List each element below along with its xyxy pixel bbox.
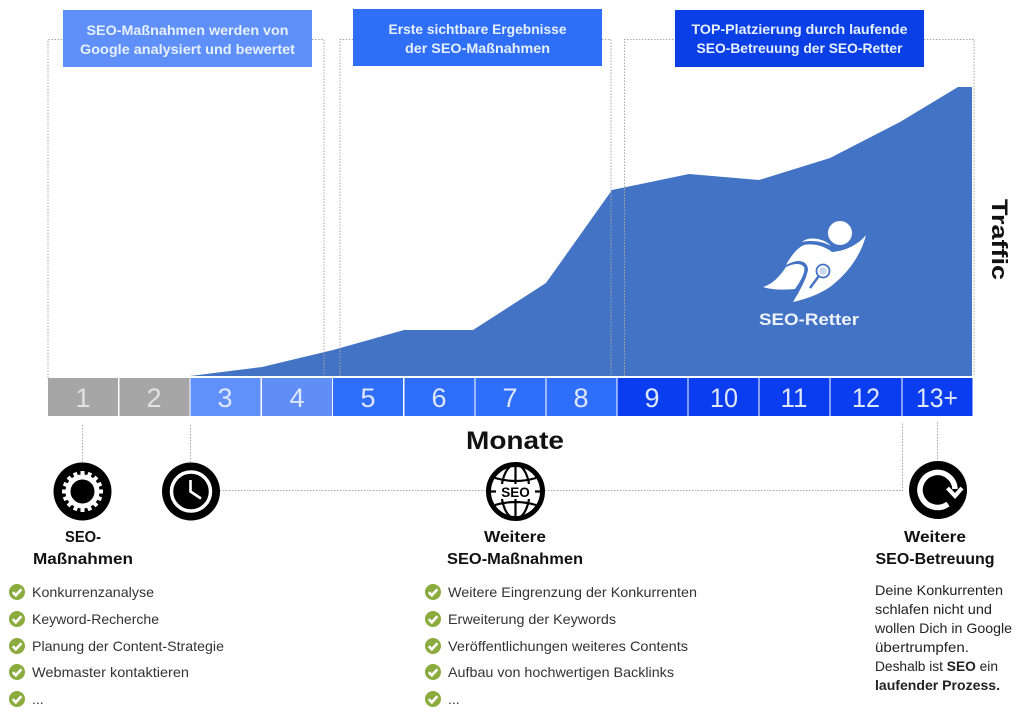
phase box 1: Google analysiert und bewertet [80, 41, 295, 57]
heading: Weitere SEO-Betreuung [876, 529, 994, 568]
logo label: SEO-Retter [759, 310, 859, 329]
checklist: SEO-Maßnahmen: Webmaster kontaktieren [32, 664, 189, 680]
month bar: 7 [502, 383, 518, 413]
text block: laufender Prozess: wollen Dich in Google [874, 620, 1012, 636]
month bar: 11 [780, 383, 808, 413]
heading: Weitere SEO-Maßnahmen: Weitere [484, 529, 546, 546]
month bar: 13+ [916, 383, 958, 413]
phase box 3: TOP-Platzierung durch laufende [692, 21, 908, 37]
month bar [48, 378, 972, 416]
icon: SEO globe [488, 464, 542, 518]
phase box 1: SEO-Maßnahmen werden von [86, 22, 288, 38]
heading: SEO-Maßnahmen [33, 529, 133, 568]
month bar: 5 [360, 383, 376, 413]
month bar: 4 [289, 383, 305, 413]
checklist: Weitere SEO-Maßnahmen [425, 584, 697, 707]
icon: SEO globe: SEO [501, 485, 530, 500]
icon: clock [162, 462, 220, 520]
checklist: Weitere SEO-Maßnahmen: Veröffentlichungen weiteres Contents [448, 638, 688, 654]
checklist: Weitere SEO-Maßnahmen: Weitere Eingrenzung der Konkurrenten [448, 584, 697, 600]
phase box 2: Erste sichtbare Ergebnisse [388, 21, 567, 37]
checklist: Weitere SEO-Maßnahmen: ... [448, 691, 460, 707]
checklist: SEO-Maßnahmen: Planung der Content-Strategie [32, 638, 224, 654]
month bar: 1 [75, 383, 91, 413]
phase box 3: SEO-Betreuung der SEO-Retter [696, 40, 903, 56]
icon: SEO-Retter superhero logo [763, 221, 866, 302]
heading: SEO-Maßnahmen: Maßnahmen [33, 551, 133, 568]
heading: Weitere SEO-Maßnahmen [447, 529, 583, 568]
text block: laufender Prozess: übertrumpfen. [875, 639, 969, 655]
checklist: Weitere SEO-Maßnahmen: Erweiterung der Keywords [448, 611, 616, 627]
heading: Weitere SEO-Maßnahmen: SEO-Maßnahmen [447, 551, 583, 568]
axis label: Monate: Monate [466, 427, 564, 455]
heading: SEO-Maßnahmen: SEO- [65, 529, 101, 546]
text block: laufender Prozess [874, 582, 1012, 693]
text block: laufender Prozess: Deine Konkurrenten [875, 582, 1003, 598]
axis label: Traffic: Traffic [987, 199, 1012, 280]
month bar: 3 [217, 383, 233, 413]
heading: Weitere SEO-Betreuung: SEO-Betreuung [876, 551, 994, 568]
text block: laufender Prozess: schlafen nicht und [875, 601, 992, 617]
traffic area chart [190, 87, 972, 376]
heading: Weitere SEO-Betreuung: Weitere [904, 529, 966, 546]
month bar: 12 [852, 383, 880, 413]
month bar: 2 [146, 383, 162, 413]
month bar: 6 [431, 383, 447, 413]
text block: laufender Prozess: Deshalb ist SEO ein [875, 658, 998, 674]
text block: laufender Prozess: laufender Prozess. [875, 677, 1000, 693]
phase box 3 [675, 10, 924, 67]
phase box 2 [353, 9, 602, 66]
phase box 1 [63, 10, 312, 67]
checklist: SEO-Maßnahmen: ... [32, 691, 44, 707]
checklist: Weitere SEO-Maßnahmen: Aufbau von hochwertigen Backlinks [448, 664, 674, 680]
checklist: SEO-Maßnahmen: Keyword-Recherche [32, 611, 159, 627]
checklist: SEO-Maßnahmen: Konkurrenzanalyse [32, 584, 154, 600]
icon: gear [54, 462, 112, 520]
month bar: 10 [710, 383, 738, 413]
month bar: 9 [644, 383, 660, 413]
icon: refresh cycle [909, 461, 967, 519]
phase box 2: der SEO-Maßnahmen [405, 40, 550, 56]
month bar: 8 [573, 383, 589, 413]
checklist: SEO-Maßnahmen [9, 584, 224, 707]
